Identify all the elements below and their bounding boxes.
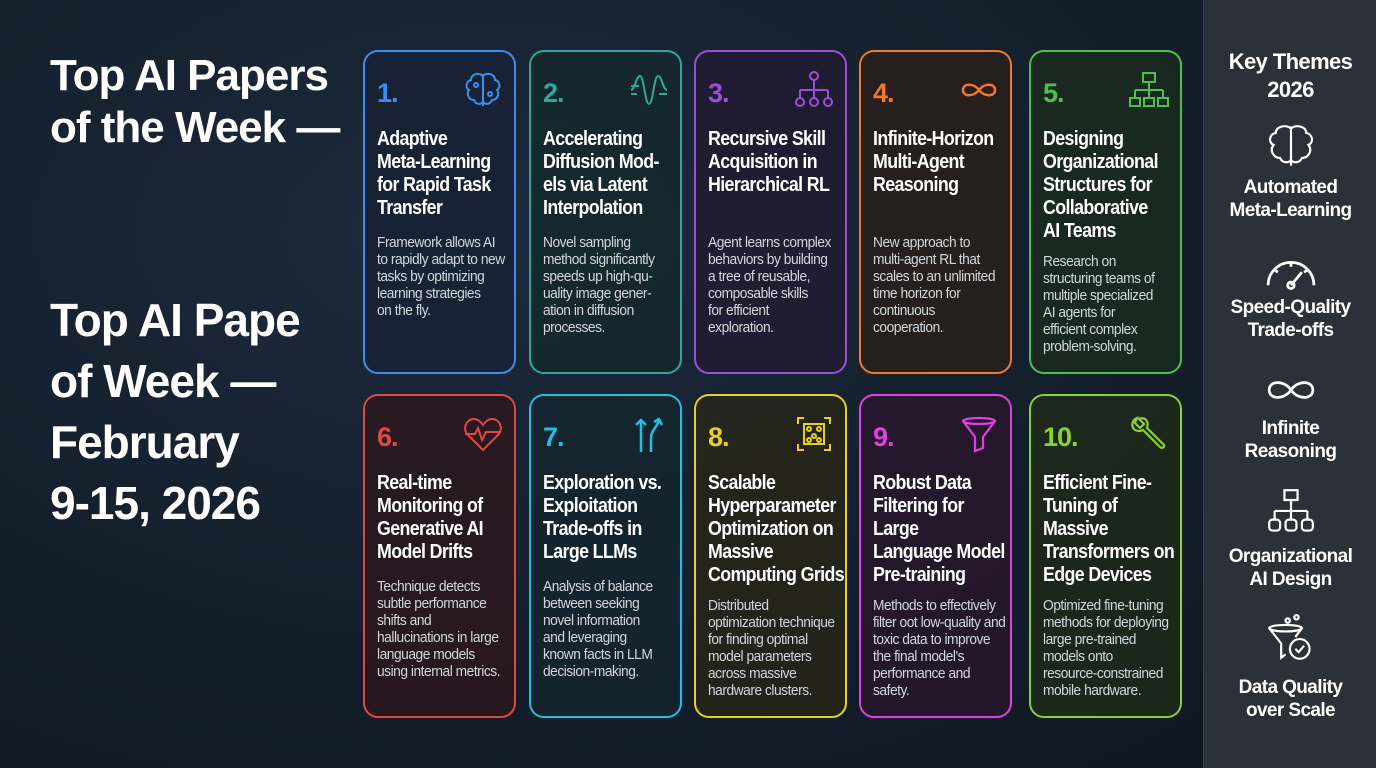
card 2: Accelerating bbox=[543, 128, 642, 150]
title: date bbox=[50, 294, 300, 529]
card 7: 7. bbox=[543, 422, 564, 452]
theme label: AI Design bbox=[1249, 569, 1332, 590]
card 8: 8. bbox=[708, 422, 729, 452]
card 1: Meta-Learning bbox=[377, 151, 491, 173]
card 8: across massive bbox=[708, 666, 796, 682]
card 1: Transfer bbox=[377, 197, 442, 219]
icon: split arrows bbox=[635, 417, 663, 452]
card 10: Efficient Fine- bbox=[1043, 472, 1151, 494]
theme label: Infinite bbox=[1262, 418, 1319, 439]
theme label bbox=[1229, 177, 1352, 221]
card 3: exploration. bbox=[708, 320, 774, 336]
card 9: Filtering for bbox=[873, 495, 964, 517]
card 6: hallucinations in large bbox=[377, 630, 499, 646]
card 10: mobile hardware. bbox=[1043, 683, 1141, 699]
card 9: Language Model bbox=[873, 541, 1005, 563]
card 4: Multi-Agent bbox=[873, 151, 964, 173]
card 4: 4. bbox=[873, 78, 894, 108]
card 9: toxic data to improve bbox=[873, 632, 990, 648]
card 9: the final model's bbox=[873, 649, 964, 665]
card 7 bbox=[529, 394, 682, 718]
theme icon: funnel check bbox=[1268, 614, 1311, 660]
icon: org chart bbox=[1129, 72, 1169, 107]
card 2: uality image gener- bbox=[543, 286, 651, 302]
card 9: Large bbox=[873, 518, 918, 540]
icon: grid nodes bbox=[797, 417, 831, 451]
card 10: Edge Devices bbox=[1043, 564, 1151, 586]
card 2: processes. bbox=[543, 320, 605, 336]
card 9: safety. bbox=[873, 683, 909, 699]
card 2: Interpolation bbox=[543, 197, 643, 219]
theme icon: gauge bbox=[1266, 261, 1316, 290]
card 1: tasks by optimizing bbox=[377, 269, 484, 285]
card 1: for Rapid Task bbox=[377, 174, 491, 196]
card 3: behaviors by building bbox=[708, 252, 827, 268]
icon: heart pulse bbox=[464, 418, 502, 452]
theme icon: brain bbox=[1268, 125, 1314, 166]
sidebar heading: 2026 bbox=[1267, 77, 1314, 102]
title: top AI papers: of the Week — bbox=[50, 103, 339, 152]
card 1: 1. bbox=[377, 78, 398, 108]
card 10 bbox=[1029, 394, 1182, 718]
icon: infinity bbox=[962, 84, 996, 96]
card 4: Infinite-Horizon bbox=[873, 128, 994, 150]
card 4: cooperation. bbox=[873, 320, 943, 336]
card 7: Analysis of balance bbox=[543, 579, 653, 595]
title: date: of Week — bbox=[50, 355, 275, 407]
card 3: Recursive Skill bbox=[708, 128, 825, 150]
card 10: methods for deploying bbox=[1043, 615, 1169, 631]
theme label: Automated bbox=[1244, 177, 1337, 198]
card 9: performance and bbox=[873, 666, 970, 682]
card 7: Trade-offs in bbox=[543, 518, 642, 540]
card 1: to rapidly adapt to new bbox=[377, 252, 505, 268]
sidebar heading: Key Themes bbox=[1229, 49, 1352, 74]
card 2: Novel sampling bbox=[543, 235, 631, 251]
card 9: Robust Data bbox=[873, 472, 971, 494]
card 7: between seeking bbox=[543, 596, 639, 612]
card 3: composable skills bbox=[708, 286, 808, 302]
card 8: Distributed bbox=[708, 598, 769, 614]
theme icon: org chart bbox=[1268, 489, 1314, 532]
card 7: Large LLMs bbox=[543, 541, 637, 563]
card 5: efficient complex bbox=[1043, 322, 1137, 338]
card 8: model parameters bbox=[708, 649, 811, 665]
icon: waves bbox=[631, 75, 667, 105]
card 7: Exploration vs. bbox=[543, 472, 661, 494]
card 8: Hyperparameter bbox=[708, 495, 836, 517]
card 6: 6. bbox=[377, 422, 398, 452]
theme label bbox=[1229, 546, 1352, 590]
sidebar: key themes bbox=[1203, 0, 1376, 768]
card 8: Optimization on bbox=[708, 518, 833, 540]
theme label: Organizational bbox=[1229, 546, 1352, 567]
card 2 bbox=[529, 50, 682, 374]
card 10: Transformers on bbox=[1043, 541, 1174, 563]
card 6: using internal metrics. bbox=[377, 664, 500, 680]
card 3: Acquisition in bbox=[708, 151, 817, 173]
card 8: Scalable bbox=[708, 472, 775, 494]
card 8: hardware clusters. bbox=[708, 683, 812, 699]
icon: brain bbox=[466, 72, 500, 106]
card 9 bbox=[859, 394, 1012, 718]
card 3 bbox=[694, 50, 847, 374]
theme label: over Scale bbox=[1246, 700, 1335, 721]
card 5: problem-solving. bbox=[1043, 339, 1136, 355]
card 2: Diffusion Mod- bbox=[543, 151, 659, 173]
card 8 bbox=[694, 394, 847, 718]
card 6: Real-time bbox=[377, 472, 452, 494]
card 5: 5. bbox=[1043, 78, 1064, 108]
card 7: and leveraging bbox=[543, 630, 627, 646]
card 10: resource-constrained bbox=[1043, 666, 1163, 682]
card 7: Exploitation bbox=[543, 495, 637, 517]
card 4 bbox=[859, 50, 1012, 374]
theme label bbox=[1231, 297, 1351, 341]
card 2: ation in diffusion bbox=[543, 303, 634, 319]
card 6: shifts and bbox=[377, 613, 431, 629]
card 2: 2. bbox=[543, 78, 564, 108]
card 5: structuring teams of bbox=[1043, 271, 1154, 287]
theme label bbox=[1245, 418, 1336, 462]
card 10: Optimized fine-tuning bbox=[1043, 598, 1163, 614]
card 7: novel information bbox=[543, 613, 640, 629]
card 5: Organizational bbox=[1043, 151, 1158, 173]
card 5: Designing bbox=[1043, 128, 1123, 150]
card 4: continuous bbox=[873, 303, 935, 319]
icon: funnel bbox=[962, 416, 996, 453]
card 5: Structures for bbox=[1043, 174, 1152, 196]
card 10: models onto bbox=[1043, 649, 1113, 665]
title: top AI papers: Top AI Papers bbox=[50, 51, 328, 100]
card 3: a tree of reusable, bbox=[708, 269, 810, 285]
card 9: Methods to effectively bbox=[873, 598, 996, 614]
card 3: 3. bbox=[708, 78, 729, 108]
card 6: Technique detects bbox=[377, 579, 480, 595]
card 5: AI agents for bbox=[1043, 305, 1115, 321]
card 2: speeds up high-qu- bbox=[543, 269, 652, 285]
card 9: filter oot low-quality and bbox=[873, 615, 1005, 631]
theme label: Meta-Learning bbox=[1229, 200, 1352, 221]
card 1: Framework allows AI bbox=[377, 235, 495, 251]
card 10: Tuning of bbox=[1043, 495, 1117, 517]
card 1 bbox=[363, 50, 516, 374]
theme label: Reasoning bbox=[1245, 441, 1336, 462]
card 4: scales to an unlimited bbox=[873, 269, 995, 285]
card 1: learning strategies bbox=[377, 286, 481, 302]
title: date: February bbox=[50, 416, 239, 468]
card 2: els via Latent bbox=[543, 174, 647, 196]
card 6 bbox=[363, 394, 516, 718]
theme icon: infinity bbox=[1268, 381, 1314, 399]
card 8: Computing Grids bbox=[708, 564, 844, 586]
card 3: Hierarchical RL bbox=[708, 174, 829, 196]
card 6: Generative AI bbox=[377, 518, 483, 540]
theme label: Trade-offs bbox=[1248, 320, 1333, 341]
sidebar heading bbox=[1229, 49, 1352, 102]
card 6: Model Drifts bbox=[377, 541, 472, 563]
card 2: method significantly bbox=[543, 252, 654, 268]
card 3: for efficient bbox=[708, 303, 769, 319]
theme label bbox=[1239, 677, 1343, 721]
title: date: Top AI Pape bbox=[50, 294, 300, 346]
title: top AI papers bbox=[50, 51, 340, 152]
title: date: 9-15, 2026 bbox=[50, 477, 260, 529]
card 8: Massive bbox=[708, 541, 773, 563]
theme label: Speed-Quality bbox=[1231, 297, 1350, 318]
card 6: Monitoring of bbox=[377, 495, 483, 517]
icon: hierarchy bbox=[795, 71, 833, 107]
icon: wrench bbox=[1131, 416, 1166, 449]
card 9: Pre-training bbox=[873, 564, 965, 586]
card 1: on the fly. bbox=[377, 303, 430, 319]
card 6: language models bbox=[377, 647, 475, 663]
card 5: Collaborative bbox=[1043, 197, 1148, 219]
card 7: decision-making. bbox=[543, 664, 639, 680]
card 10: large pre-trained bbox=[1043, 632, 1136, 648]
theme label: Data Quality bbox=[1239, 677, 1342, 698]
card 9: 9. bbox=[873, 422, 894, 452]
card 4: time horizon for bbox=[873, 286, 960, 302]
card 8: for finding optimal bbox=[708, 632, 808, 648]
card 7: known facts in LLM bbox=[543, 647, 652, 663]
card 8: optimization technique bbox=[708, 615, 835, 631]
card 6: subtle performance bbox=[377, 596, 486, 612]
card 5: AI Teams bbox=[1043, 220, 1116, 242]
card 5: Research on bbox=[1043, 254, 1116, 270]
card 4: multi-agent RL that bbox=[873, 252, 980, 268]
card 1: Adaptive bbox=[377, 128, 447, 150]
card 5: multiple specialized bbox=[1043, 288, 1153, 304]
card 5 bbox=[1029, 50, 1182, 374]
card 10: Massive bbox=[1043, 518, 1108, 540]
card 10: 10. bbox=[1043, 422, 1078, 452]
card 3: Agent learns complex bbox=[708, 235, 831, 251]
card 4: Reasoning bbox=[873, 174, 958, 196]
card 4: New approach to bbox=[873, 235, 970, 251]
